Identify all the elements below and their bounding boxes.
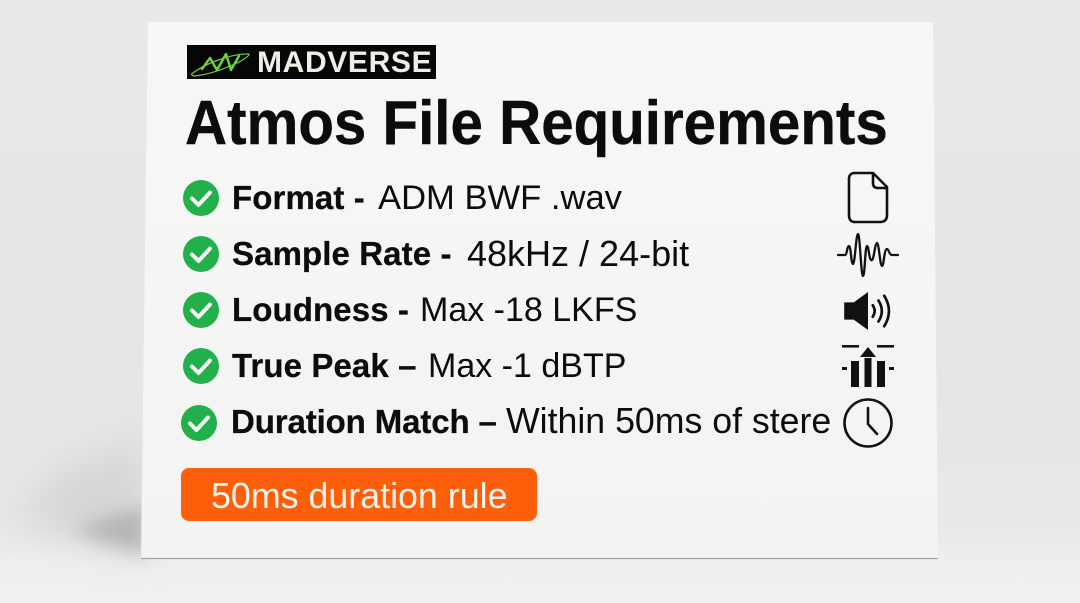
text: sample rate: Sample Rate -	[232, 235, 452, 272]
logo wordmark: MADVERSE	[257, 46, 432, 79]
text: duration match	[231, 401, 831, 441]
text: format	[232, 179, 622, 217]
requirement row: loudness	[183, 291, 890, 330]
text: true peak	[232, 347, 626, 385]
icon: check	[181, 405, 217, 441]
requirement row: true peak: Max -1 dBTP	[428, 347, 626, 385]
text: true peak: True Peak –	[232, 347, 417, 384]
requirement row: format	[183, 172, 888, 224]
icon: waveform	[837, 233, 899, 277]
logo: Madverse	[187, 45, 436, 79]
badge label: 50ms duration rule	[211, 476, 507, 516]
requirement row: loudness: Max -18 LKFS	[420, 291, 637, 329]
icon: clock	[843, 398, 893, 448]
icon: check	[183, 236, 219, 272]
badge: 50ms duration rule	[181, 468, 537, 521]
icon: waveform logo mark	[191, 52, 250, 77]
icon: peak meter	[842, 345, 894, 387]
icon: check	[183, 180, 219, 216]
text: sample rate	[232, 233, 689, 274]
title: Atmos File Requirements	[185, 89, 888, 158]
requirement row: duration match	[181, 398, 893, 448]
text: loudness	[232, 291, 637, 329]
icon: file	[848, 172, 888, 224]
requirement row: format: ADM BWF .wav	[378, 179, 622, 217]
text: duration match: Duration Match –	[231, 403, 497, 440]
requirement row: sample rate: 48kHz / 24-bit	[467, 233, 689, 274]
text: format: Format -	[232, 179, 365, 216]
requirement row: true peak	[183, 345, 894, 387]
requirement row: duration match: Within 50ms of stere	[506, 401, 831, 441]
text: loudness: Loudness -	[232, 291, 409, 328]
requirement row: sample rate	[183, 233, 899, 277]
icon: speaker	[844, 292, 890, 330]
icon: check	[183, 292, 219, 328]
icon: check	[183, 348, 219, 384]
